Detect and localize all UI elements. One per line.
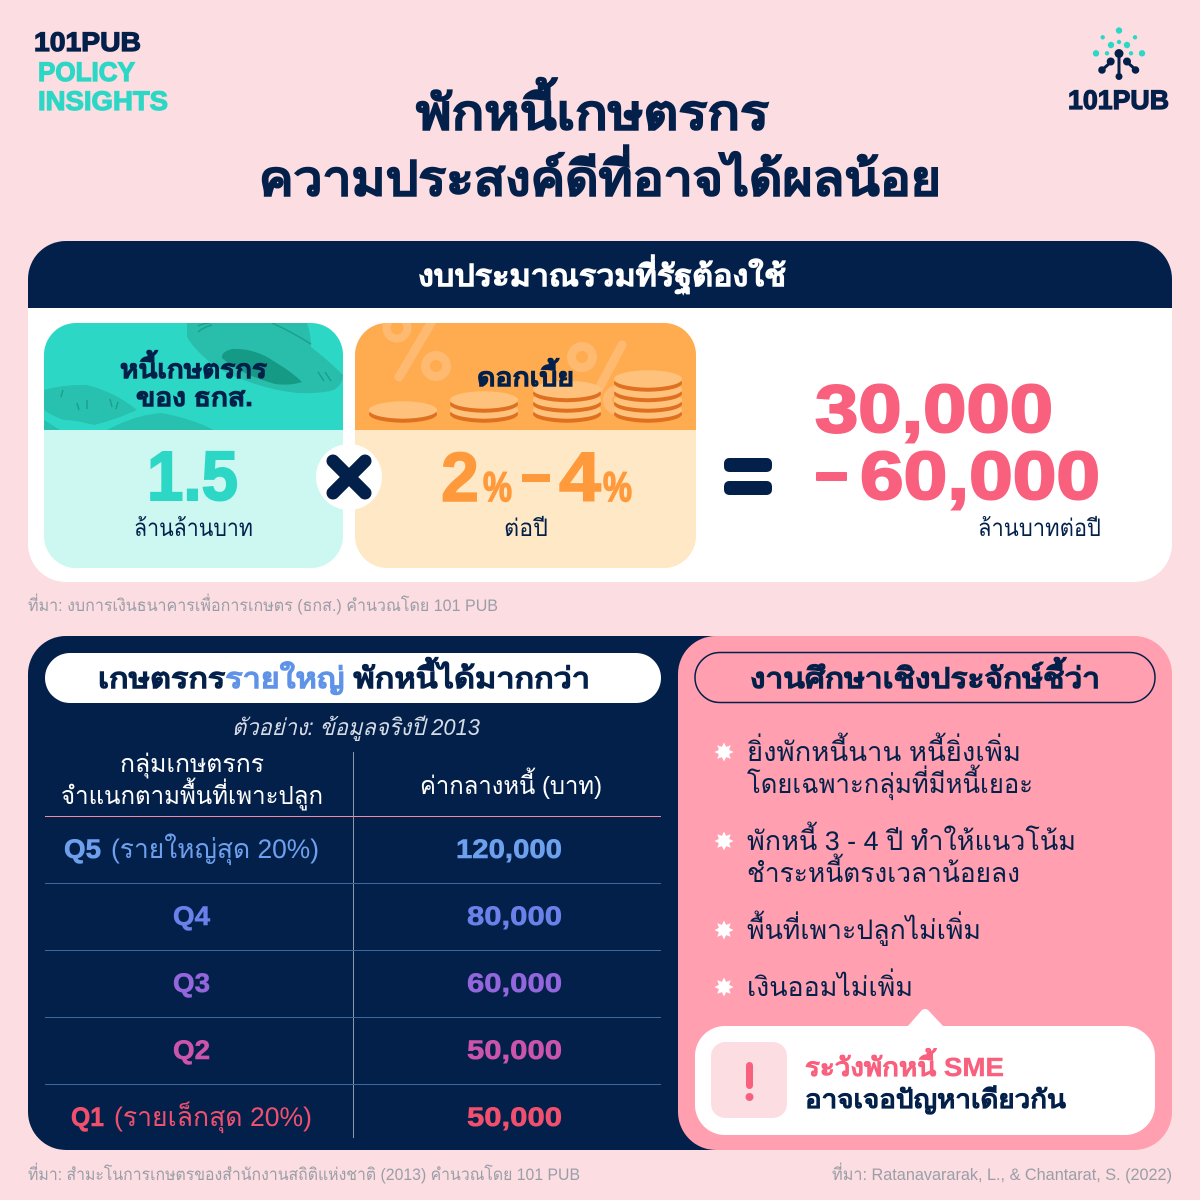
finding 2: พักหนี้ 3 - 4 ปี ทำให้แนวโน้ม xyxy=(747,821,1076,856)
card: interest: ต่อปี xyxy=(504,515,548,542)
logo: 101PUB Policy Insights: 101PUB xyxy=(34,27,141,57)
total result: ล้านบาทต่อปี xyxy=(978,515,1101,542)
findings heading: งานศึกษาเชิงประจักษ์ชี้ว่า xyxy=(750,656,1100,695)
table column headers: กลุ่มเกษตรกร xyxy=(120,750,264,779)
row: Q4: 80,000 xyxy=(467,901,562,931)
source note: table: ที่มา: สำมะโนการเกษตรของสำนักงานสถิติแห่งชาติ (2013) คำนวณโดย 101 PUB xyxy=(28,1162,580,1184)
title: ความประสงค์ดีที่อาจได้ผลน้อย xyxy=(259,144,941,206)
logo: 101PUB Policy Insights: INSIGHTS xyxy=(38,86,168,116)
card: interest: ดอกเบี้ย xyxy=(477,357,574,392)
finding 1: โดยเฉพาะกลุ่มที่มีหนี้เยอะ xyxy=(747,764,1033,801)
row: Q5: Q5 xyxy=(64,834,101,864)
icon: multiply sign xyxy=(316,444,382,510)
finding 1 xyxy=(714,732,1033,801)
row: Q2: 50,000 xyxy=(467,1035,562,1065)
row: Q3 xyxy=(173,968,562,998)
panel: empirical findings xyxy=(678,636,1172,1150)
row: Q1: Q1 xyxy=(71,1102,104,1132)
finding 4: เงินออมไม่เพิ่ม xyxy=(747,968,913,1002)
card: farmer debt xyxy=(44,323,343,568)
card: farmer debt: หนี้เกษตรกร xyxy=(120,349,267,384)
findings heading xyxy=(695,652,1155,702)
callout: SME warning: อาจเจอปัญหาเดียวกัน xyxy=(805,1084,1066,1115)
panel: debt table xyxy=(28,636,740,1150)
table column headers xyxy=(61,750,602,811)
finding 1: ยิ่งพักหนี้นาน หนี้ยิ่งเพิ่ม xyxy=(747,732,1021,767)
finding 3: พื้นที่เพาะปลูกไม่เพิ่ม xyxy=(747,910,981,946)
row: Q4 xyxy=(173,901,562,931)
illustration: hat and fields xyxy=(44,323,343,430)
total result: 60,000 xyxy=(860,438,1100,514)
row: Q5: 120,000 xyxy=(456,834,562,864)
source note: budget: ที่มา: งบการเงินธนาคารเพื่อการเกษตร (ธกส.) คำนวณโดย 101 PUB xyxy=(28,593,498,615)
table heading xyxy=(45,653,661,703)
table column headers: จำแนกตามพื้นที่เพาะปลูก xyxy=(61,777,323,811)
callout: SME warning xyxy=(695,1009,1155,1135)
total result xyxy=(815,371,1101,542)
row: Q5: (รายใหญ่สุด 20%) xyxy=(111,833,319,866)
table column headers: ค่ากลางหนี้ (บาท) xyxy=(420,767,602,800)
row: Q1 xyxy=(71,1099,562,1134)
card: interest: 2 xyxy=(441,438,479,516)
decoration: percent signs xyxy=(386,318,628,410)
row: Q5 xyxy=(64,833,562,866)
finding 2: ชำระหนี้ตรงเวลาน้อยลง xyxy=(747,853,1020,888)
logo: 101PUB Policy Insights: POLICY xyxy=(38,57,135,87)
budget heading: งบประมาณรวมที่รัฐต้องใช้ xyxy=(418,254,786,296)
row: Q3: 60,000 xyxy=(467,968,562,998)
row: Q2: Q2 xyxy=(173,1035,210,1065)
table grid xyxy=(45,752,661,1138)
icon: coin stacks xyxy=(369,370,682,423)
icon: exclamation xyxy=(711,1042,787,1118)
card: interest xyxy=(355,318,696,568)
row: Q2 xyxy=(173,1035,562,1065)
icon: equals sign xyxy=(724,458,772,495)
title: พักหนี้เกษตรกร xyxy=(416,77,769,140)
row: Q1: 50,000 xyxy=(467,1102,562,1132)
logo: 101PUB Policy Insights xyxy=(34,27,168,116)
card: farmer debt: 1.5 xyxy=(147,437,238,515)
callout: SME warning: ระวังพักหนี้ SME xyxy=(805,1047,1004,1082)
panel: total budget xyxy=(28,241,1172,582)
source note: studies: ที่มา: Ratanavararak, L., & Chantarat, S. (2022) xyxy=(832,1162,1172,1184)
card: interest: 4 xyxy=(559,438,601,516)
logo: 101PUB emblem xyxy=(1068,27,1169,115)
table heading: เกษตรกร รายใหญ่ พักหนี้ได้มากกว่า xyxy=(98,656,590,696)
card: interest: % xyxy=(603,463,632,510)
row: Q4: Q4 xyxy=(173,901,210,931)
title xyxy=(259,77,941,206)
card: farmer debt: ล้านล้านบาท xyxy=(134,515,253,542)
total result: 30,000 xyxy=(815,371,1053,447)
row: Q1: (รายเล็กสุด 20%) xyxy=(114,1099,312,1134)
logo: 101PUB emblem: 101PUB xyxy=(1068,85,1169,115)
finding 2 xyxy=(714,821,1076,888)
row: Q3: Q3 xyxy=(173,968,210,998)
table subtitle: ตัวอย่าง: ข้อมูลจริงปี 2013 xyxy=(232,714,480,741)
card: interest: % xyxy=(483,463,512,510)
card: farmer debt: ของ ธกส. xyxy=(136,382,253,412)
